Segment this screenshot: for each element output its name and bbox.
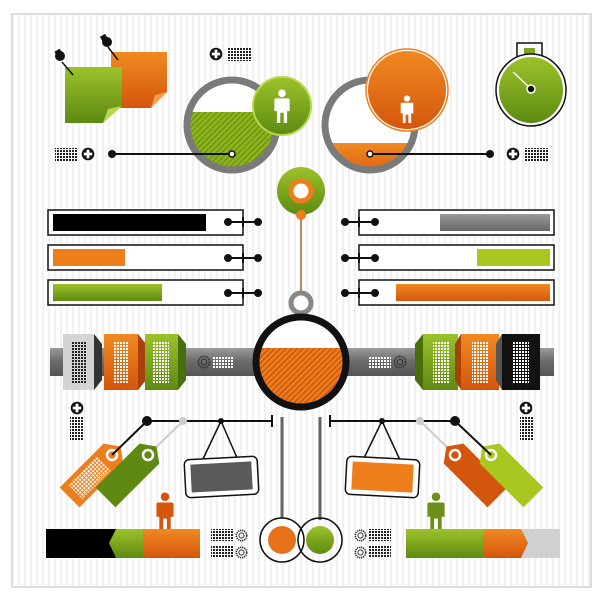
sticky notes	[54, 34, 167, 123]
right ring chart	[322, 76, 418, 174]
map pin with line	[277, 167, 325, 292]
left ring chart	[184, 76, 280, 174]
green person circle	[253, 77, 311, 135]
right gear icons	[355, 529, 391, 558]
right bars	[342, 210, 554, 305]
left hanger with tags and sign	[60, 415, 272, 507]
right segments	[415, 334, 423, 390]
right plus icon	[520, 402, 533, 441]
left bottom bar with person	[46, 492, 200, 558]
right bottom bar with person	[406, 492, 560, 558]
right hanger with tags and sign	[330, 415, 543, 507]
left segments	[94, 334, 102, 390]
orange person circle	[366, 49, 448, 131]
icon: plus grid top	[210, 48, 251, 61]
pipe with segments	[50, 334, 554, 390]
left gear icons	[211, 529, 247, 558]
left bars	[48, 210, 261, 305]
connector lines top	[55, 148, 548, 161]
central flask ring	[250, 293, 354, 408]
side plus icons	[70, 402, 83, 441]
pendulum circles	[260, 417, 342, 562]
stopwatch	[496, 43, 566, 126]
